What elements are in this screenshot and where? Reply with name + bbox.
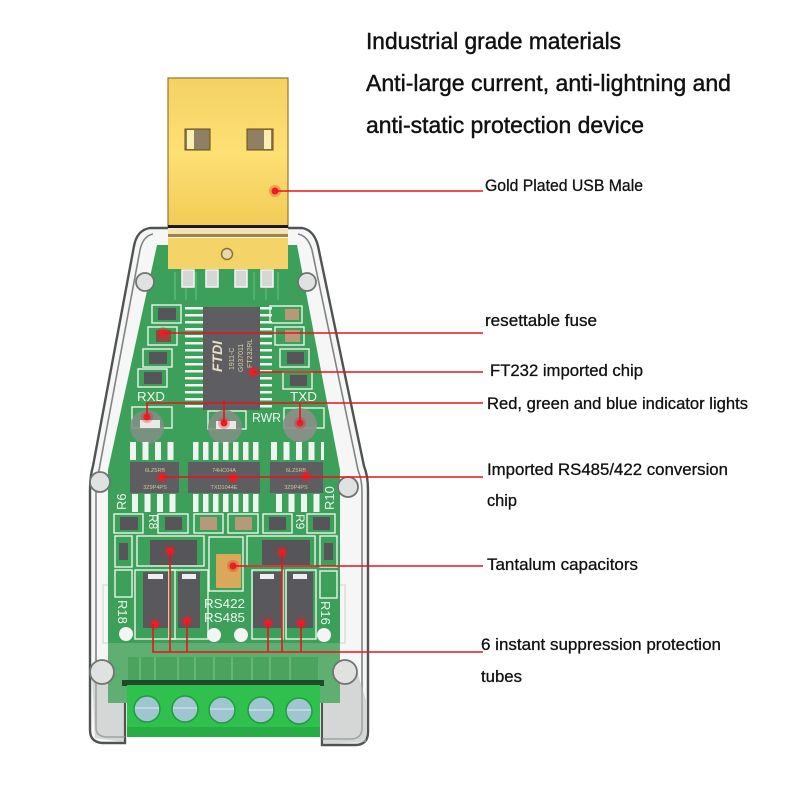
- callout: FT232 imported chip: FT232 imported chip: [490, 361, 643, 380]
- TVS suppression tubes: [135, 536, 316, 639]
- lower passive row: R6: [114, 493, 129, 510]
- green terminal block: [122, 657, 324, 737]
- callout: resettable fuse: [157, 311, 597, 339]
- RS485/422 conversion chips: 6LZ5RB: [145, 468, 165, 474]
- FT232 chip: [194, 307, 266, 410]
- heading: Anti-large current, anti-lightning and: [366, 70, 731, 96]
- FT232 chip: G037011: [238, 344, 245, 372]
- indicator LEDs: RWR: [252, 410, 281, 425]
- callout: gold plated USB male: Gold Plated USB Male: [485, 176, 643, 195]
- callout: RS485/422 conversion chip: Imported RS485/422 conversion: [487, 460, 728, 479]
- callout: RS485/422 conversion chip: chip: [487, 491, 517, 510]
- lower passive row: [114, 486, 337, 625]
- FT232 chip: FTDI: [209, 340, 225, 372]
- callout: tantalum capacitors: Tantalum capacitors: [487, 555, 638, 574]
- lower passive row: R16: [318, 601, 333, 625]
- RS485/422 conversion chips: [130, 451, 324, 503]
- USB solder pads: [182, 270, 273, 287]
- callout: FT232 imported chip: [247, 361, 643, 380]
- case screws: [90, 273, 358, 684]
- RS485/422 conversion chips: TXD1044E: [211, 485, 238, 491]
- mounting holes: [119, 627, 331, 642]
- board silkscreen RS422 RS485: [204, 596, 245, 625]
- callout: tantalum capacitors: [227, 555, 638, 574]
- callout: suppression protection tubes: tubes: [481, 667, 522, 686]
- gold plated USB plug: [168, 78, 288, 269]
- RS485/422 conversion chips: 6LZ5RB: [286, 468, 306, 474]
- RS485/422 conversion chips: 3Z9P4PS: [143, 485, 167, 491]
- board silkscreen RS422 RS485: RS422: [204, 596, 245, 611]
- lower passive row: R10: [322, 486, 337, 510]
- RS485/422 conversion chips: 74HC04A: [212, 468, 236, 474]
- callout: resettable fuse: resettable fuse: [485, 311, 597, 330]
- indicator LEDs: RXD: [137, 389, 165, 404]
- heading: Industrial grade materials: [366, 28, 621, 54]
- callout: gold plated USB male: [269, 176, 643, 197]
- indicator LEDs: [130, 389, 324, 444]
- heading: anti-static protection device: [366, 112, 644, 138]
- heading: [366, 28, 731, 138]
- FT232 chip: FT232RL: [247, 339, 254, 368]
- lower passive row: R8: [146, 514, 160, 530]
- tantalum capacitor: [209, 537, 243, 591]
- lower passive row: R18: [115, 600, 130, 624]
- board silkscreen RS422 RS485: RS485: [204, 610, 245, 625]
- lower passive row: R9: [293, 514, 307, 530]
- FT232 chip: 1911-C: [229, 348, 236, 370]
- upper passive components: [138, 305, 312, 389]
- callout: suppression protection tubes: 6 instant suppression protection: [481, 635, 721, 654]
- callout: indicator lights: Red, green and blue indicator lights: [487, 394, 748, 413]
- circuit board: [108, 245, 340, 703]
- callout: indicator lights: [141, 394, 748, 429]
- RS485/422 conversion chips: 3Z9P4PS: [284, 485, 308, 491]
- indicator LEDs: TXD: [290, 389, 317, 404]
- transparent case: [90, 228, 368, 745]
- callout: suppression protection tubes: [149, 545, 721, 686]
- callout: RS485/422 conversion chip: [156, 460, 728, 510]
